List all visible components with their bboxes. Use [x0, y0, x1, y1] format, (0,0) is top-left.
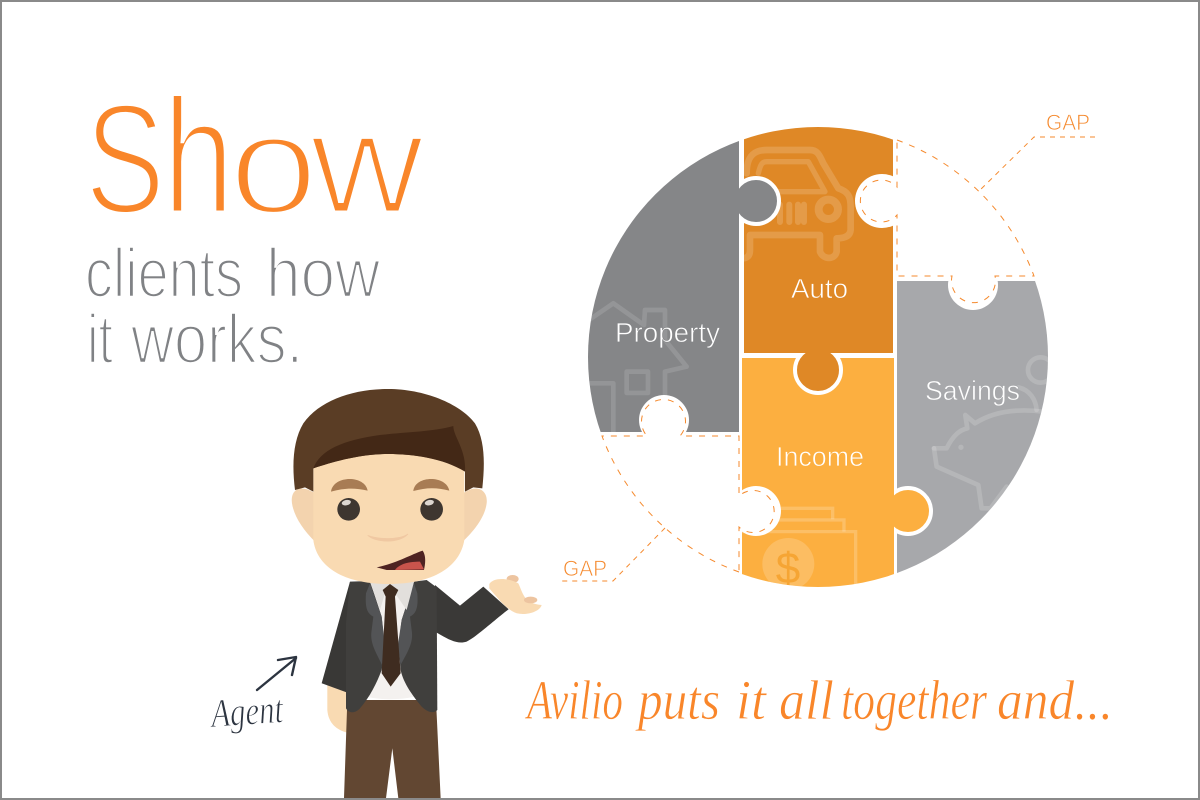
- subheading: it works.: it: [87, 300, 113, 378]
- subheading: clients how: clients: [85, 234, 243, 312]
- heading: Show: h: [163, 64, 234, 248]
- character: agent: [292, 389, 542, 798]
- callout: GAP top right: GAP: [1046, 110, 1090, 135]
- hair: [293, 389, 484, 492]
- puzzle piece: Auto: [744, 127, 893, 353]
- mouth: [377, 551, 425, 570]
- puzzle circle: [587, 127, 1053, 593]
- hole in Property piece: [639, 395, 689, 445]
- eyes: [337, 498, 443, 521]
- tagline: together: [841, 670, 987, 732]
- trousers: [344, 700, 441, 798]
- heading: Show: S: [85, 72, 165, 247]
- hair shadow: [313, 426, 465, 472]
- tagline: all: [779, 670, 834, 732]
- knob: Property to Auto: [725, 170, 779, 232]
- callout: GAP bottom left: GAP: [563, 556, 607, 581]
- hole in Income piece: [731, 486, 781, 536]
- collar: [370, 582, 414, 610]
- puzzle piece: Property: [587, 127, 739, 445]
- nose: [368, 534, 408, 541]
- icon: house: [587, 303, 687, 433]
- ears: [292, 489, 315, 542]
- puzzle piece: Savings: [897, 281, 1048, 573]
- label: Savings: Savings: [925, 375, 1020, 406]
- hand gesture: [489, 575, 542, 614]
- jacket left panel: [346, 581, 385, 712]
- lapels: [366, 583, 418, 665]
- tagline: puts: [634, 670, 720, 732]
- subheading: clients how: how: [266, 234, 380, 312]
- tagline: Avilio: [524, 670, 623, 732]
- subheading: it works.: works.: [130, 300, 303, 378]
- jacket sleeve: [322, 582, 353, 693]
- dashed gap outline: bottom left: [602, 399, 774, 572]
- icon: car: [742, 150, 851, 258]
- knob: Income to Savings: [878, 480, 931, 542]
- heading: Show: w: [309, 82, 425, 244]
- label: Agent: Agent: [207, 686, 285, 736]
- left hand: [327, 685, 350, 733]
- label: Income: Income: [776, 441, 864, 472]
- hole in Auto piece: [855, 174, 909, 228]
- arrow: pointing at agent: [257, 657, 296, 690]
- icon: piggy bank: [934, 357, 1053, 508]
- shirt: [368, 582, 415, 699]
- heading: Show: o: [229, 85, 318, 243]
- eyebrows: [331, 479, 449, 492]
- tie: [382, 584, 401, 687]
- face: [313, 443, 464, 584]
- hole in Savings piece: [948, 260, 998, 310]
- label: Auto: Auto: [791, 273, 848, 304]
- puzzle piece: Income: [731, 358, 894, 593]
- right arm: [435, 585, 509, 643]
- label: Property: Property: [615, 317, 720, 348]
- callout: GAP bottom left: [562, 528, 665, 581]
- icon: money: [740, 508, 856, 593]
- tagline: it: [736, 670, 767, 732]
- jacket right panel: [398, 580, 437, 712]
- knob: Auto to Income: [790, 340, 846, 393]
- icon: money: $: [776, 544, 800, 593]
- dashed gap outline: top right: [860, 140, 1034, 303]
- tagline: and...: [997, 670, 1113, 732]
- callout: GAP top right: [979, 110, 1095, 191]
